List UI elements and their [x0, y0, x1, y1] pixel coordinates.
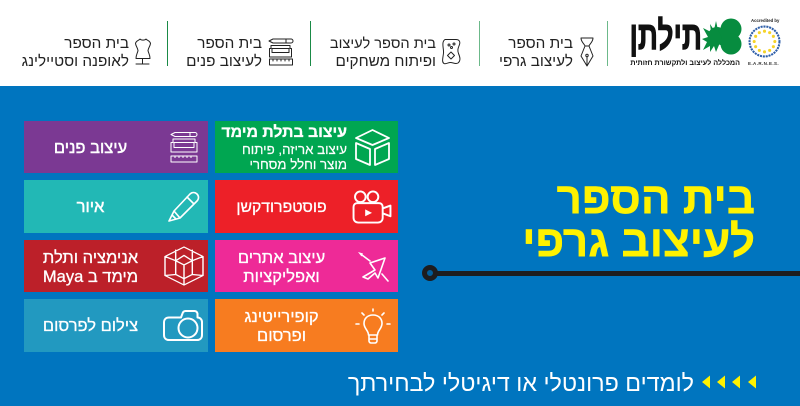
description: עיצוב אריזה, פיתוח [242, 142, 347, 157]
icon: 3D cube [164, 246, 204, 286]
tile: web and apps [215, 240, 398, 292]
timeline line with dot [422, 265, 800, 281]
tile: photography [24, 299, 208, 352]
tile: copywriting [215, 299, 398, 352]
label: צילום לפרסום [43, 316, 138, 334]
label: ופרסום [257, 326, 306, 344]
label: ופיתוח משחקים [336, 53, 436, 70]
accreditation seal: Accredited by [751, 18, 779, 23]
header bar [0, 0, 800, 86]
tagline: לומדים פרונטלי או דיגיטלי לבחירתך [348, 370, 694, 396]
title: בית הספר [557, 174, 755, 223]
tile: 3D design [215, 121, 398, 173]
label: לאופנה וסטיילינג [22, 53, 129, 70]
label: עיצוב פנים [54, 138, 127, 156]
label [22, 35, 129, 70]
label: בית הספר [64, 35, 129, 52]
description: מוצר וחלל מסחרי [249, 157, 347, 172]
accreditation seal: E.A.R.N.E.S. [748, 61, 779, 66]
logo: Tiltan [629, 14, 742, 67]
title [522, 174, 755, 266]
label [238, 248, 325, 286]
label [186, 35, 262, 70]
accreditation seal [748, 18, 780, 66]
tile: dark red animation [24, 240, 208, 292]
icon: mannequin [135, 38, 151, 64]
header item: fashion [22, 35, 151, 70]
icon: box [355, 129, 390, 166]
icon: sofa and ruler [170, 132, 198, 162]
icon: sofa and ruler [268, 38, 294, 66]
title: לעיצוב גרפי [522, 217, 755, 266]
icon: pencil [168, 192, 200, 222]
blue panel [0, 86, 800, 406]
tile: illustration [24, 180, 208, 233]
label [43, 248, 138, 286]
label: ואפליקציות [243, 268, 320, 286]
label: פוסטפרודקשן [236, 199, 327, 216]
label: מימד ב Maya [43, 268, 138, 286]
label [330, 36, 436, 70]
label: לעיצוב גרפי [499, 53, 573, 70]
description [242, 142, 347, 172]
logo tagline: המכללה לעיצוב ולתקשורת חזותית [630, 58, 740, 67]
label: איור [77, 198, 104, 216]
icon: pen nib [580, 38, 594, 66]
icon: cursor and brush [358, 252, 389, 282]
label: בית הספר [197, 35, 262, 52]
logo wordmark: תילתן [629, 14, 702, 58]
tile: interior design [24, 121, 208, 173]
label: בית הספר [508, 35, 573, 52]
label [244, 308, 319, 344]
label [499, 35, 573, 70]
label: עיצוב אתרים [238, 248, 325, 266]
logo green splash [702, 18, 742, 54]
text block [221, 124, 347, 172]
label: בית הספר לעיצוב [330, 36, 436, 52]
tile: post production [215, 180, 398, 233]
arrows: four yellow triangles [702, 376, 756, 388]
icon: film camera [352, 190, 392, 224]
header item: interior design [186, 35, 294, 70]
icon: light bulb [355, 308, 391, 344]
icon: camera [163, 310, 203, 341]
header item: graphic design [499, 35, 594, 70]
label: אנימציה ותלת [43, 248, 138, 266]
heading: עיצוב בתלת מימד [221, 124, 347, 141]
label: קופירייטינג [244, 308, 319, 326]
icon: gamepad [442, 39, 460, 64]
label: לעיצוב פנים [186, 53, 262, 70]
header item: game design [330, 36, 460, 70]
